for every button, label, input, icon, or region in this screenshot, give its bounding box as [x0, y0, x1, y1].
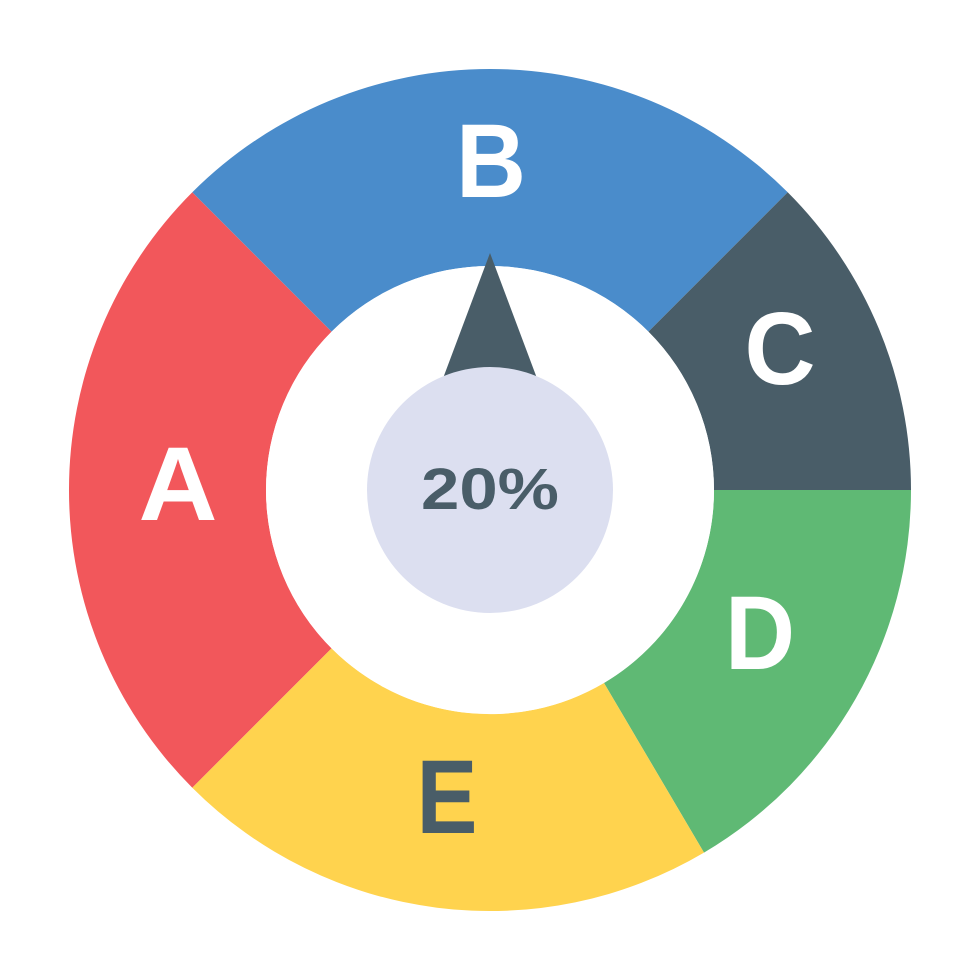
segment A: red [69, 192, 332, 788]
center white disc [266, 266, 714, 714]
label C: C [744, 291, 816, 406]
label D: D [725, 575, 795, 692]
gauge needle [442, 253, 538, 381]
segment E: yellow [192, 648, 704, 911]
segment D: green [604, 490, 911, 853]
label E: E [416, 739, 478, 856]
label A: A [138, 426, 218, 543]
segment C: dark slate [648, 192, 911, 490]
percentage value: 20% [421, 457, 559, 522]
gauge hub with percentage [367, 367, 613, 613]
label B: B [456, 103, 526, 220]
segment B: blue [192, 69, 788, 332]
